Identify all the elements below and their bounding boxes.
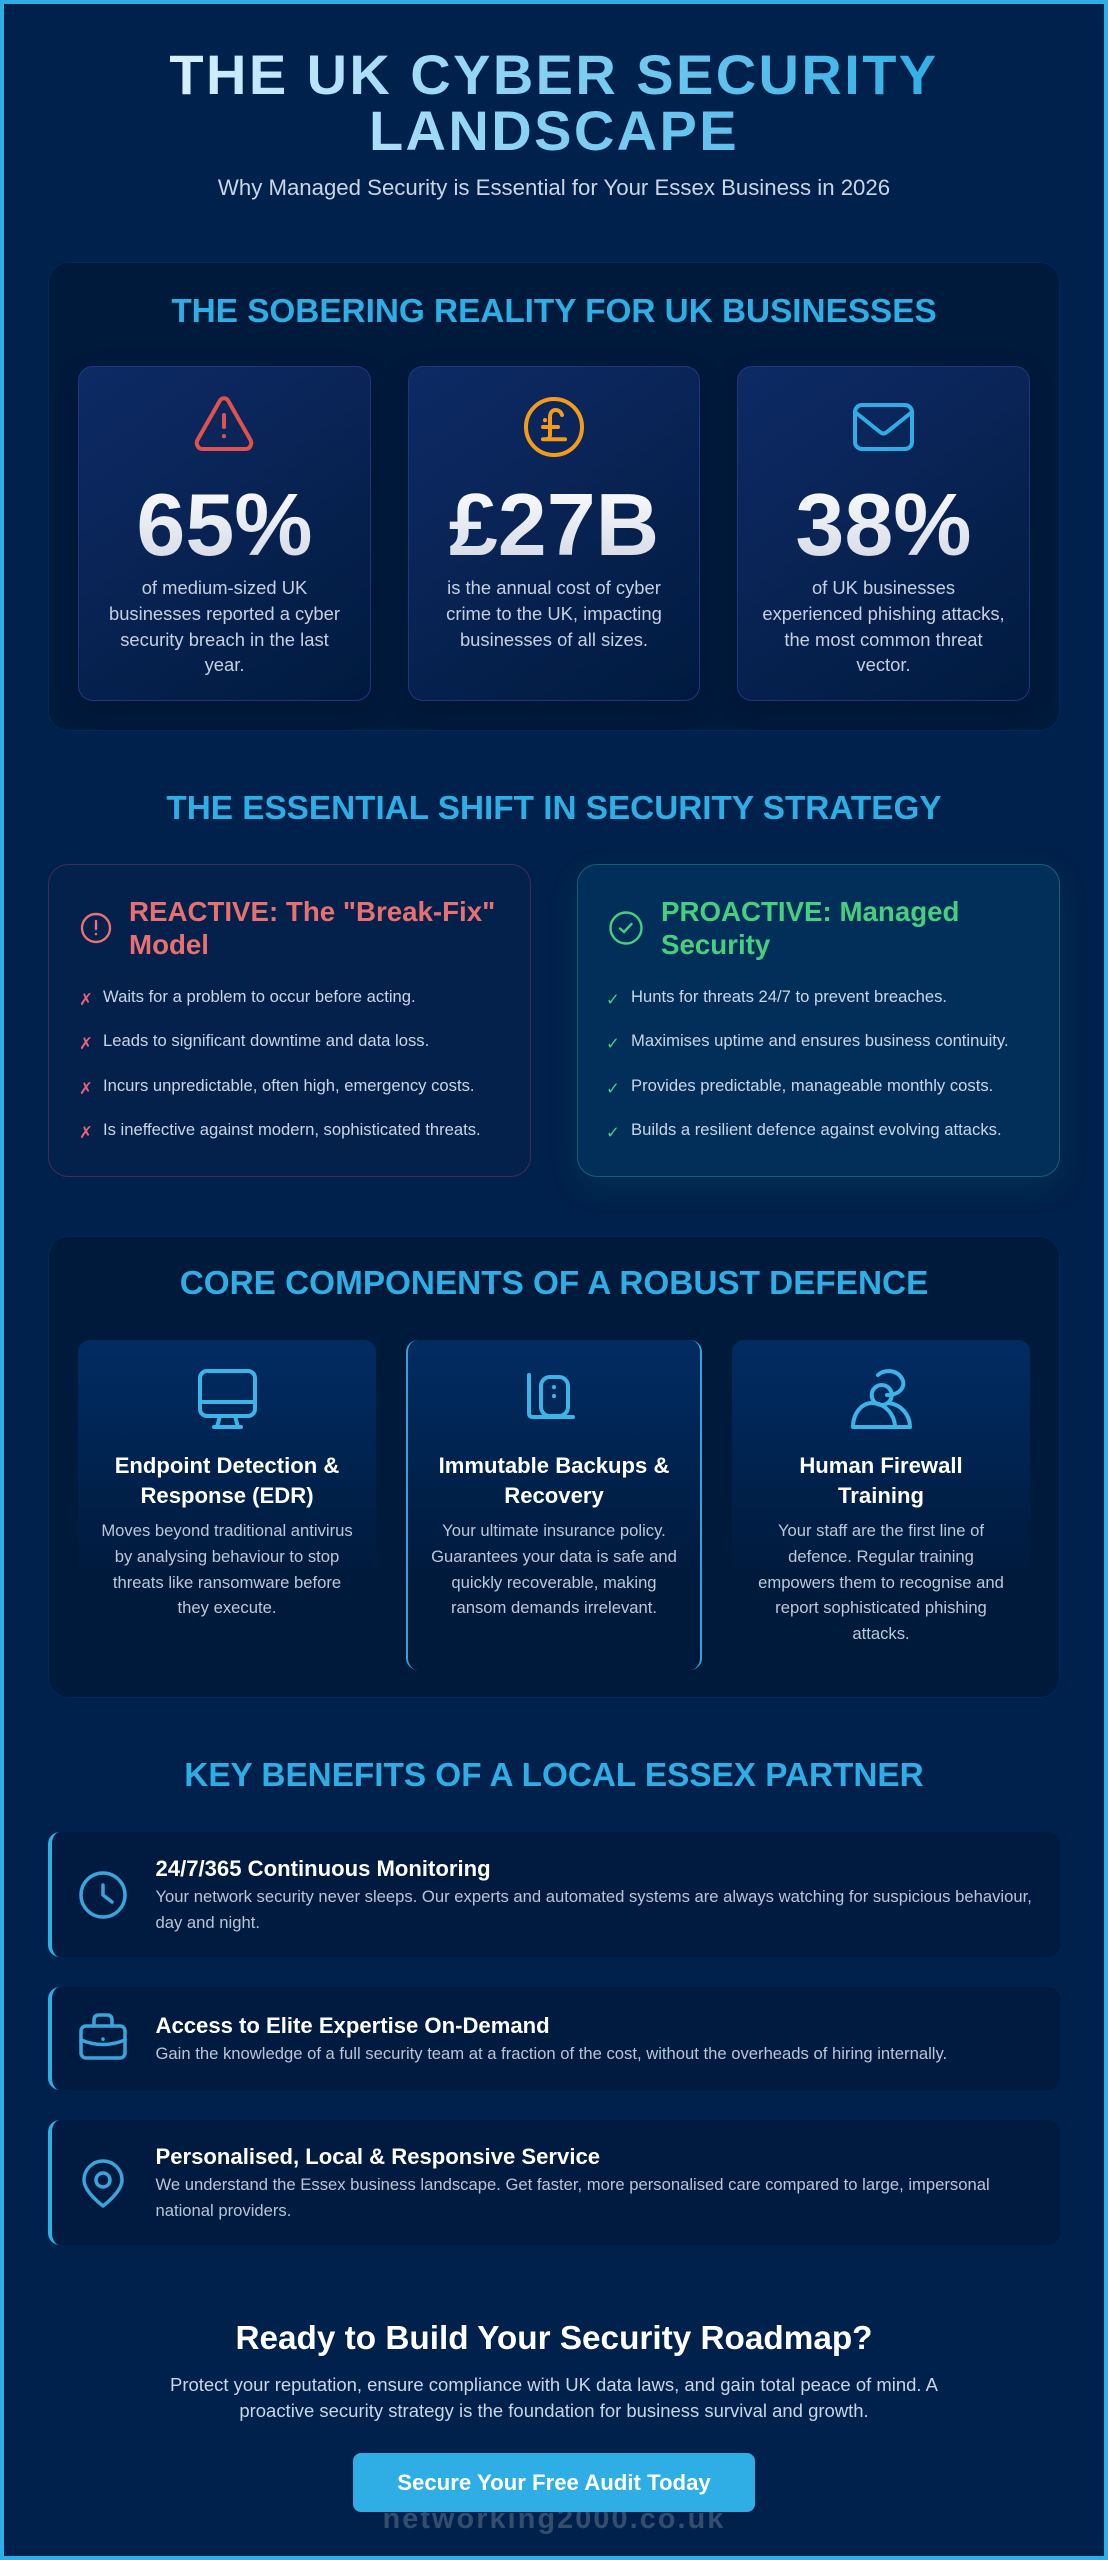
list: proactive benefits: ✓ bbox=[606, 990, 620, 1009]
stat description bbox=[762, 577, 1005, 675]
list: proactive benefits: Builds a resilient defence against evolving attacks. bbox=[631, 1120, 1002, 1139]
card: immutable backups bbox=[406, 1340, 702, 1670]
heading: sobering reality: THE SOBERING REALITY FOR UK BUSINESSES bbox=[171, 292, 937, 330]
stat description: experienced phishing attacks, bbox=[762, 603, 1005, 624]
list: proactive benefits: ✓ bbox=[606, 1034, 620, 1053]
list: reactive drawbacks: ✗ bbox=[79, 1123, 93, 1142]
card heading bbox=[439, 1453, 669, 1508]
card text: empowers them to recognise and bbox=[758, 1573, 1004, 1592]
stat description: businesses of all sizes. bbox=[460, 629, 648, 650]
card text: they execute. bbox=[178, 1598, 276, 1617]
stat description: of UK businesses bbox=[812, 577, 955, 598]
text: call to action: proactive security strategy is the foundation for business survival and growth. bbox=[239, 2400, 869, 2421]
card text: by analysing behaviour to stop bbox=[115, 1547, 339, 1566]
stat description bbox=[109, 577, 340, 675]
icon: clock bbox=[79, 1871, 127, 1919]
card text: Guarantees your data is safe and bbox=[431, 1547, 677, 1566]
benefit text: Your network security never sleeps. Our experts and automated systems are always watching for suspicious behaviour, bbox=[156, 1887, 1032, 1906]
icon: backup storage bbox=[527, 1373, 575, 1419]
stat number bbox=[737, 477, 1030, 573]
card text: Your ultimate insurance policy. bbox=[442, 1521, 666, 1540]
panel: core components bbox=[48, 1236, 1060, 1698]
heading: core components: CORE COMPONENTS OF A ROBUST DEFENCE bbox=[180, 1265, 928, 1302]
list: reactive drawbacks: ✗ bbox=[79, 1079, 93, 1098]
heading: reactive: REACTIVE: The "Break-Fix" bbox=[129, 896, 495, 927]
icon: pound coin bbox=[524, 397, 584, 457]
icon: exclamation circle bbox=[80, 912, 112, 944]
benefit text: national providers. bbox=[156, 2201, 291, 2220]
card text: attacks. bbox=[852, 1624, 910, 1643]
list: proactive benefits: Maximises uptime and ensures business continuity. bbox=[631, 1031, 1009, 1050]
stat number: £27B bbox=[449, 475, 659, 574]
stat description: year. bbox=[205, 654, 244, 675]
card text: defence. Regular training bbox=[788, 1547, 974, 1566]
stat description: businesses reported a cyber bbox=[109, 603, 340, 624]
card heading: Endpoint Detection & bbox=[115, 1453, 339, 1478]
heading: proactive: PROACTIVE: Managed bbox=[661, 896, 959, 927]
list: proactive benefits bbox=[606, 987, 1009, 1142]
stat description: of medium-sized UK bbox=[142, 577, 307, 598]
card: endpoint detection bbox=[78, 1340, 376, 1670]
stat number: 38% bbox=[795, 475, 972, 574]
icon: monitor bbox=[198, 1369, 257, 1429]
card text: Moves beyond traditional antivirus bbox=[101, 1521, 353, 1540]
benefit text bbox=[156, 1887, 1032, 1932]
title bbox=[160, 47, 948, 159]
card heading: Human Firewall bbox=[799, 1453, 963, 1478]
card heading bbox=[799, 1453, 963, 1508]
stat number bbox=[78, 477, 371, 573]
card heading: Recovery bbox=[504, 1483, 604, 1508]
stat card: £27B bbox=[408, 366, 700, 701]
stat description: vector. bbox=[856, 654, 911, 675]
list: proactive benefits: Provides predictable, manageable monthly costs. bbox=[631, 1076, 993, 1095]
stat description: the most common threat bbox=[784, 629, 983, 650]
icon: briefcase bbox=[79, 2013, 127, 2060]
list: proactive benefits: ✓ bbox=[606, 1123, 620, 1142]
benefit title: Personalised, Local & Responsive Service bbox=[156, 2144, 600, 2169]
list: reactive drawbacks: Is ineffective against modern, sophisticated threats. bbox=[103, 1120, 481, 1139]
panel: proactive model bbox=[577, 864, 1060, 1177]
card text bbox=[431, 1521, 677, 1617]
benefit: local service bbox=[48, 2120, 1060, 2245]
heading: essential shift: THE ESSENTIAL SHIFT IN SECURITY STRATEGY bbox=[166, 790, 942, 827]
text: call to action bbox=[170, 2374, 938, 2421]
heading: proactive bbox=[661, 896, 959, 960]
title: LANDSCAPE bbox=[369, 99, 739, 162]
list: reactive drawbacks bbox=[79, 987, 481, 1142]
icon: warning triangle bbox=[194, 396, 254, 451]
heading: proactive: Security bbox=[661, 929, 770, 960]
list: reactive drawbacks: Incurs unpredictable, often high, emergency costs. bbox=[103, 1076, 474, 1095]
icon: people bbox=[851, 1369, 912, 1429]
list: reactive drawbacks: Waits for a problem to occur before acting. bbox=[103, 987, 416, 1006]
panel: reactive model bbox=[48, 864, 531, 1177]
watermark: networking2000.co.uk bbox=[383, 2503, 725, 2535]
stat description: is the annual cost of cyber bbox=[447, 577, 661, 598]
list: reactive drawbacks: ✗ bbox=[79, 990, 93, 1009]
benefit: elite expertise bbox=[48, 1987, 1060, 2090]
card: human firewall bbox=[732, 1340, 1030, 1670]
title: THE UK CYBER SECURITY bbox=[169, 43, 939, 106]
subtitle: Why Managed Security is Essential for Your Essex Business in 2026 bbox=[218, 175, 890, 200]
stat description: security breach in the last bbox=[120, 629, 329, 650]
heading: reactive bbox=[129, 896, 495, 960]
card heading: Response (EDR) bbox=[140, 1483, 314, 1508]
benefit title: Access to Elite Expertise On-Demand bbox=[156, 2013, 550, 2038]
benefit: continuous monitoring bbox=[48, 1832, 1060, 1957]
card heading: Immutable Backups & bbox=[439, 1453, 669, 1478]
card text: ransom demands irrelevant. bbox=[451, 1598, 657, 1617]
benefit text bbox=[156, 2175, 990, 2220]
panel: sobering reality bbox=[48, 262, 1060, 731]
card heading: Training bbox=[838, 1483, 924, 1508]
button: secure audit bbox=[353, 2453, 755, 2512]
list: proactive benefits: Hunts for threats 24/7 to prevent breaches. bbox=[631, 987, 947, 1006]
card text bbox=[758, 1521, 1004, 1643]
stat card: 38% bbox=[737, 366, 1030, 701]
benefit title: 24/7/365 Continuous Monitoring bbox=[156, 1856, 491, 1881]
card heading bbox=[115, 1453, 339, 1508]
stat description: crime to the UK, impacting bbox=[446, 603, 662, 624]
icon: envelope bbox=[852, 403, 914, 451]
stat number: 65% bbox=[136, 475, 313, 574]
icon: check circle bbox=[609, 911, 643, 945]
card text: quickly recoverable, making bbox=[451, 1573, 657, 1592]
stat description bbox=[446, 577, 662, 650]
benefit text: We understand the Essex business landscape. Get faster, more personalised care compared to large, impersonal bbox=[156, 2175, 990, 2194]
card text: report sophisticated phishing bbox=[775, 1598, 987, 1617]
list: reactive drawbacks: ✗ bbox=[79, 1034, 93, 1053]
heading: call to action: Ready to Build Your Security Roadmap? bbox=[235, 2320, 873, 2357]
card text: threats like ransomware before bbox=[113, 1573, 341, 1592]
stat card: 65% bbox=[78, 366, 371, 701]
list: reactive drawbacks: Leads to significant downtime and data loss. bbox=[103, 1031, 429, 1050]
benefit text: Gain the knowledge of a full security team at a fraction of the cost, without the overheads of hiring internally. bbox=[156, 2044, 947, 2063]
card text bbox=[101, 1521, 353, 1617]
heading: key benefits: KEY BENEFITS OF A LOCAL ESSEX PARTNER bbox=[184, 1757, 924, 1794]
benefit text: day and night. bbox=[156, 1913, 260, 1932]
icon: map pin bbox=[82, 2159, 124, 2208]
card text: Your staff are the first line of bbox=[778, 1521, 984, 1540]
text: call to action: Protect your reputation, ensure compliance with UK data laws, and gain total peace of mind. A bbox=[170, 2374, 938, 2395]
heading: reactive: Model bbox=[129, 929, 209, 960]
button: secure audit: Secure Your Free Audit Today bbox=[397, 2470, 711, 2495]
list: proactive benefits: ✓ bbox=[606, 1079, 620, 1098]
